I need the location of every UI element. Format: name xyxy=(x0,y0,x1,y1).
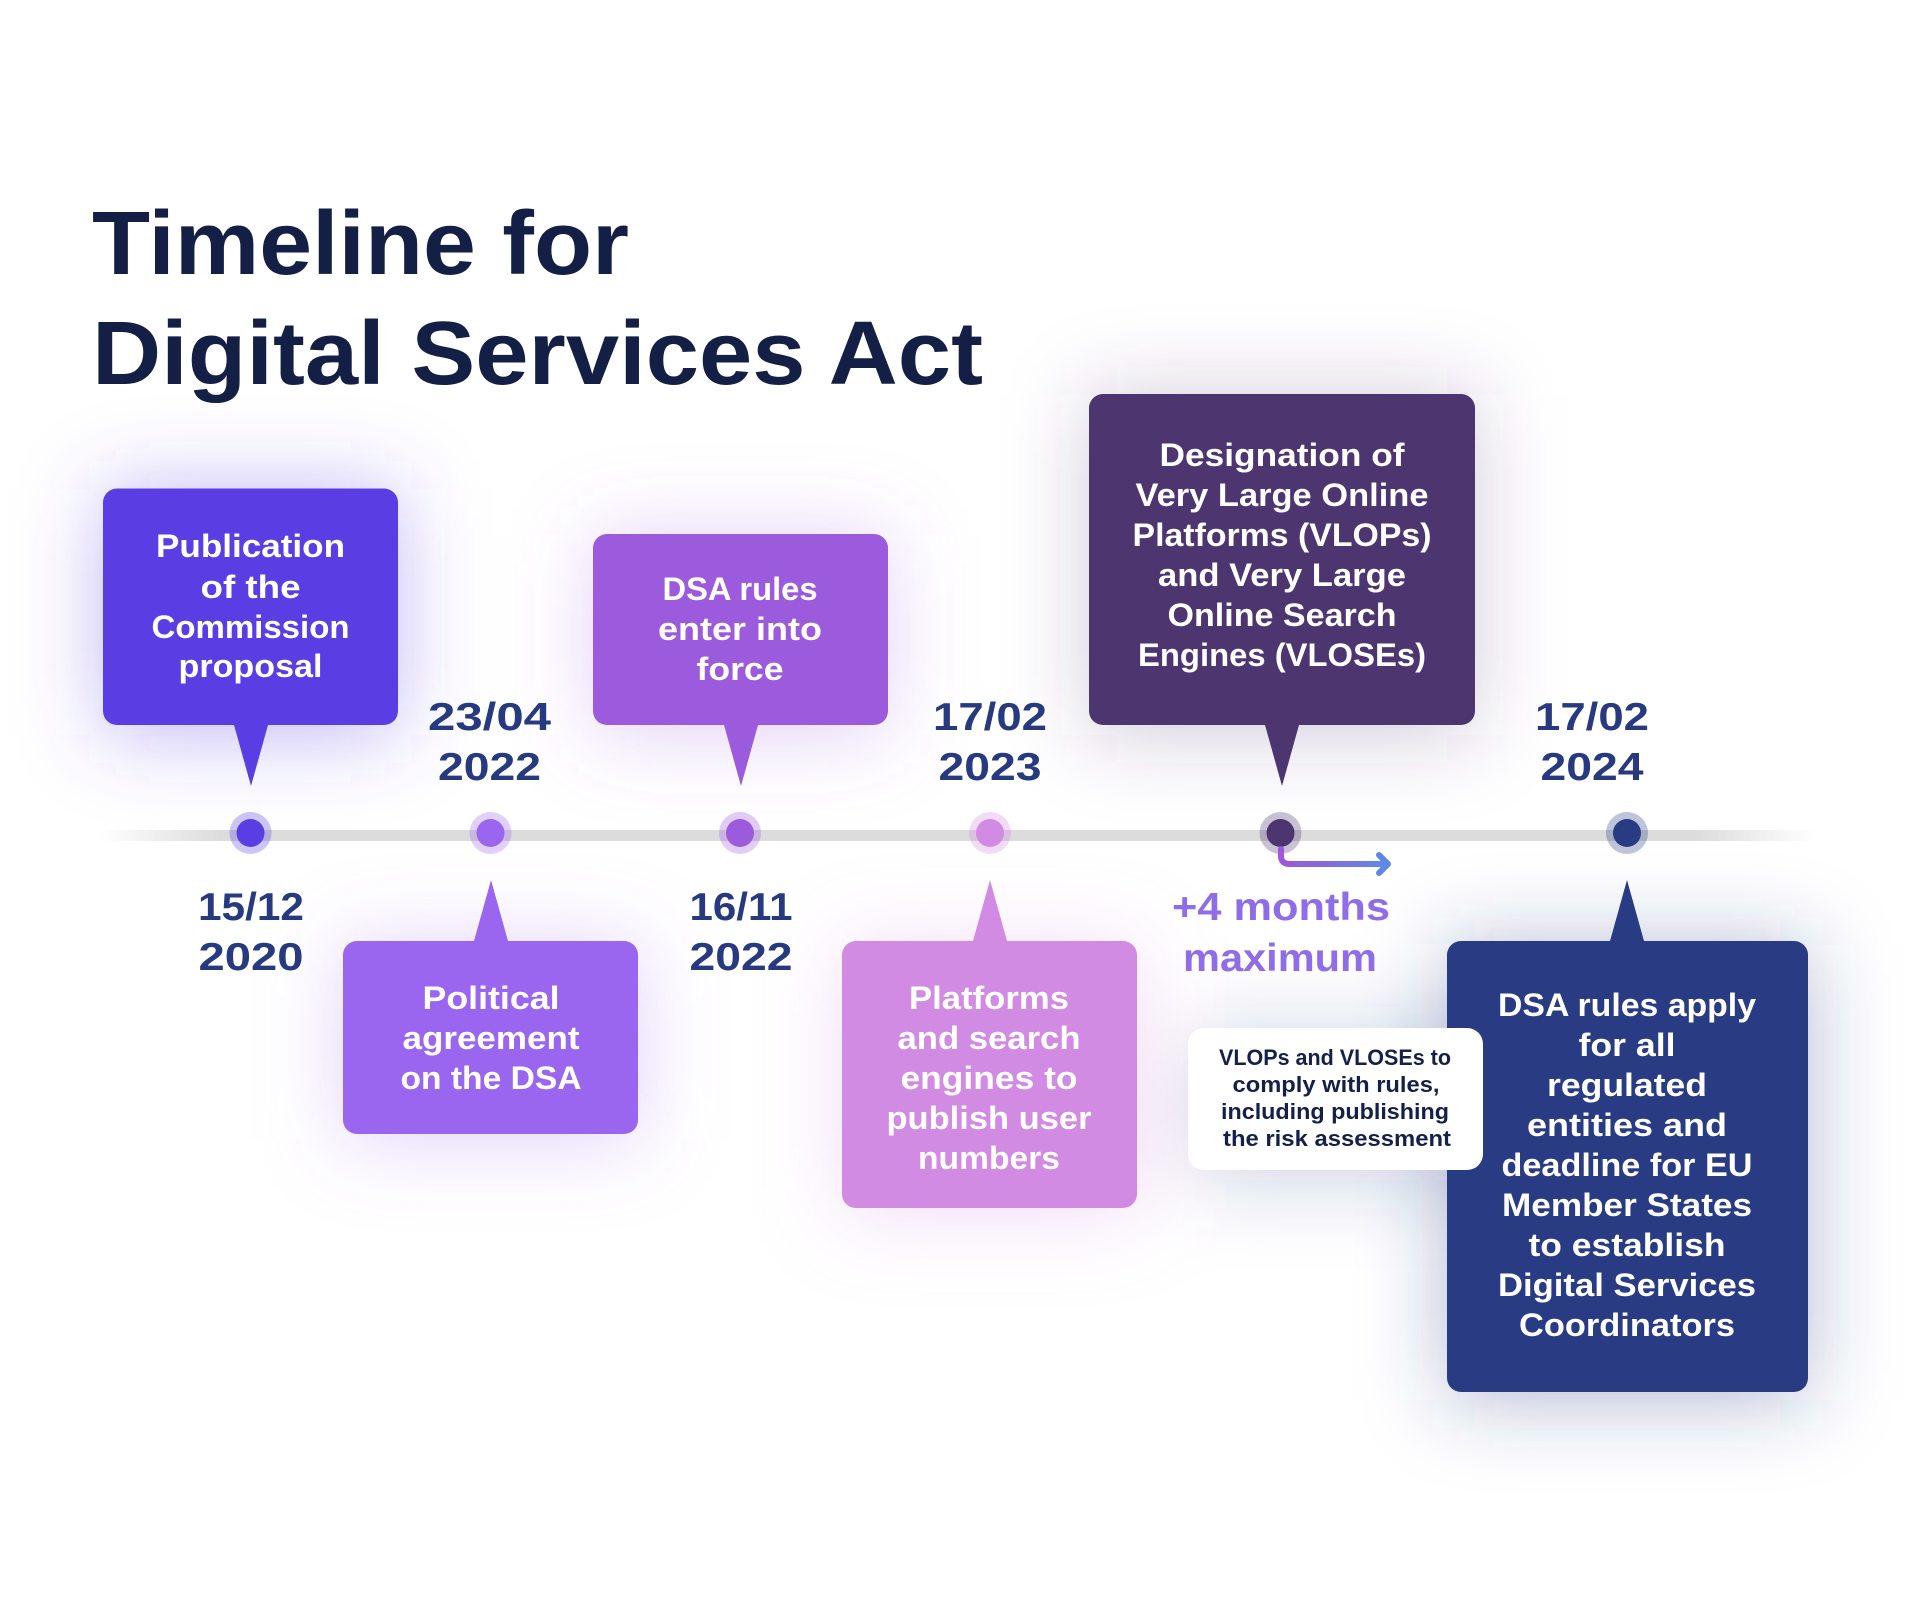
panel: Platforms and search engines to publish user numbers xyxy=(842,880,1137,1208)
callout: VLOPs and VLOSEs to comply xyxy=(1188,1028,1483,1170)
panel: Platforms and search engines to publish user numbers: numbers xyxy=(918,1140,1060,1176)
panel: Platforms and search engines to publish user numbers: engines to xyxy=(900,1060,1078,1096)
date: 16/11 2022: 16/11 xyxy=(690,886,792,929)
label: +4 months maximum: +4 months xyxy=(1172,886,1390,929)
panel: DSA rules apply for all regulated entities: to establish xyxy=(1528,1227,1726,1263)
date: 17/02 2024: 2024 xyxy=(1540,746,1644,789)
panel: DSA rules enter into force: force xyxy=(696,651,784,687)
panel: Designation of VLOPs and VLOSEs: Very Large Online xyxy=(1136,477,1428,513)
date: 23/04 2022 xyxy=(428,696,551,789)
panel: DSA rules apply for all regulated entities: Coordinators xyxy=(1519,1307,1735,1343)
marker: 15/12/2020 xyxy=(230,812,272,854)
panel: Designation of VLOPs and VLOSEs: Platforms (VLOPs) xyxy=(1132,517,1432,553)
panel: Political agreement on the DSA xyxy=(343,880,638,1134)
panel: Publication of the Commission proposal xyxy=(103,488,398,786)
panel: DSA rules enter into force: enter into xyxy=(658,611,822,647)
panel: DSA rules apply for all regulated entities: Digital Services xyxy=(1498,1267,1756,1303)
date: 17/02 2023: 17/02 xyxy=(933,696,1047,739)
callout: VLOPs and VLOSEs to comply: comply with rules, xyxy=(1232,1072,1440,1097)
panel: DSA rules apply for all regulated entities: for all xyxy=(1578,1027,1676,1063)
panel: Platforms and search engines to publish user numbers: Platforms xyxy=(909,980,1069,1016)
panel: Publication of the Commission proposal: proposal xyxy=(178,648,322,684)
panel: DSA rules enter into force: DSA rules xyxy=(662,571,818,607)
panel: Designation of VLOPs and VLOSEs: and Very Large xyxy=(1158,557,1406,593)
callout: VLOPs and VLOSEs to comply: VLOPs and VLOSEs to xyxy=(1219,1045,1451,1070)
date: 15/12 2020: 15/12 xyxy=(198,886,304,929)
date: 17/02 2023: 2023 xyxy=(938,746,1042,789)
panel: DSA rules apply for all regulated entities xyxy=(1447,880,1808,1392)
panel: Platforms and search engines to publish user numbers: and search xyxy=(898,1020,1080,1056)
date: 23/04 2022: 2022 xyxy=(438,746,541,789)
marker: 17/02/2024 xyxy=(1606,812,1648,854)
marker: 17/02/2023 xyxy=(969,812,1011,854)
panel: Political agreement on the DSA: agreement xyxy=(402,1020,580,1056)
panel: Designation of VLOPs and VLOSEs: Online Search xyxy=(1168,597,1396,633)
panel: Platforms and search engines to publish user numbers: publish user xyxy=(886,1100,1092,1136)
label: +4 months maximum xyxy=(1172,886,1390,980)
panel: Designation of VLOPs and VLOSEs: Engines (VLOSEs) xyxy=(1138,637,1426,673)
panel: DSA rules apply for all regulated entities: deadline for EU xyxy=(1502,1147,1752,1183)
panel: Publication of the Commission proposal: Publication xyxy=(156,528,345,564)
panel: DSA rules enter into force xyxy=(593,534,888,786)
panel: Designation of VLOPs and VLOSEs: Designation of xyxy=(1160,437,1405,473)
marker: 23/04/2022 xyxy=(470,812,512,854)
panel: DSA rules apply for all regulated entities: regulated xyxy=(1547,1067,1707,1103)
label: +4 months maximum: maximum xyxy=(1183,937,1377,980)
panel: Publication of the Commission proposal: Commission xyxy=(152,609,350,645)
timeline axis xyxy=(100,830,1815,841)
panel: Publication of the Commission proposal: of the xyxy=(200,569,300,605)
date: 17/02 2023 xyxy=(933,696,1047,789)
date: 15/12 2020: 2020 xyxy=(198,936,304,979)
panel: Designation of VLOPs and VLOSEs xyxy=(1089,394,1475,786)
callout: VLOPs and VLOSEs to comply: including publishing xyxy=(1221,1099,1449,1124)
title: Digital Services Act xyxy=(92,304,983,404)
arrow: plus four months xyxy=(1281,849,1388,873)
panel: DSA rules apply for all regulated entities: entities and xyxy=(1527,1107,1727,1143)
date: 16/11 2022 xyxy=(690,886,792,979)
panel: Political agreement on the DSA: Political xyxy=(422,980,560,1016)
callout: VLOPs and VLOSEs to comply: the risk assessment xyxy=(1223,1126,1452,1151)
panel: DSA rules apply for all regulated entities: Member States xyxy=(1502,1187,1752,1223)
date: 23/04 2022: 23/04 xyxy=(428,696,551,739)
marker: 16/11/2022 xyxy=(719,812,761,854)
title xyxy=(92,194,983,404)
panel: DSA rules apply for all regulated entities: DSA rules apply xyxy=(1498,987,1756,1023)
panel: Political agreement on the DSA: on the DSA xyxy=(400,1060,582,1096)
marker: designation xyxy=(1260,812,1302,854)
date: 15/12 2020 xyxy=(198,886,304,979)
title: Timeline for xyxy=(92,194,629,294)
date: 16/11 2022: 2022 xyxy=(690,936,792,979)
date: 17/02 2024: 17/02 xyxy=(1535,696,1649,739)
date: 17/02 2024 xyxy=(1535,696,1649,789)
